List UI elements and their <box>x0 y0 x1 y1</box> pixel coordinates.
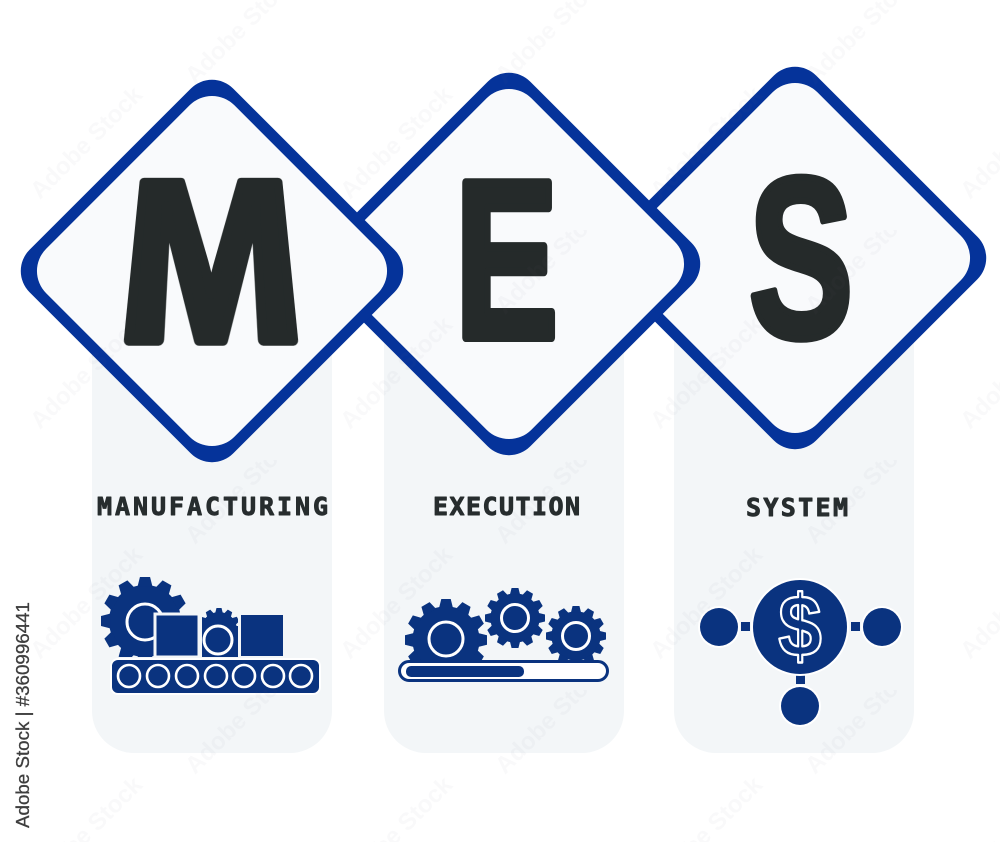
label: system: SYSTEM <box>746 493 848 522</box>
icon: dollar network <box>698 578 903 727</box>
panel: manufacturing column <box>92 300 332 753</box>
diamond: letter S <box>591 54 999 462</box>
letter E: E <box>455 134 558 386</box>
panel: system column <box>674 300 914 753</box>
label: execution: EXECUTION <box>433 492 580 521</box>
letter S: S <box>748 130 854 386</box>
dollar sign: $ <box>778 578 822 675</box>
panel: execution column <box>384 300 624 753</box>
diamond: letter E <box>305 60 713 468</box>
diamond: letter M <box>8 67 416 475</box>
icon: conveyor belt with gears and boxes <box>101 577 320 694</box>
icon: gears with progress bar <box>400 588 608 681</box>
label: manufacturing: MANUFACTURING <box>97 492 328 521</box>
stock id side text: Adobe Stock | #360996441 <box>12 602 33 828</box>
